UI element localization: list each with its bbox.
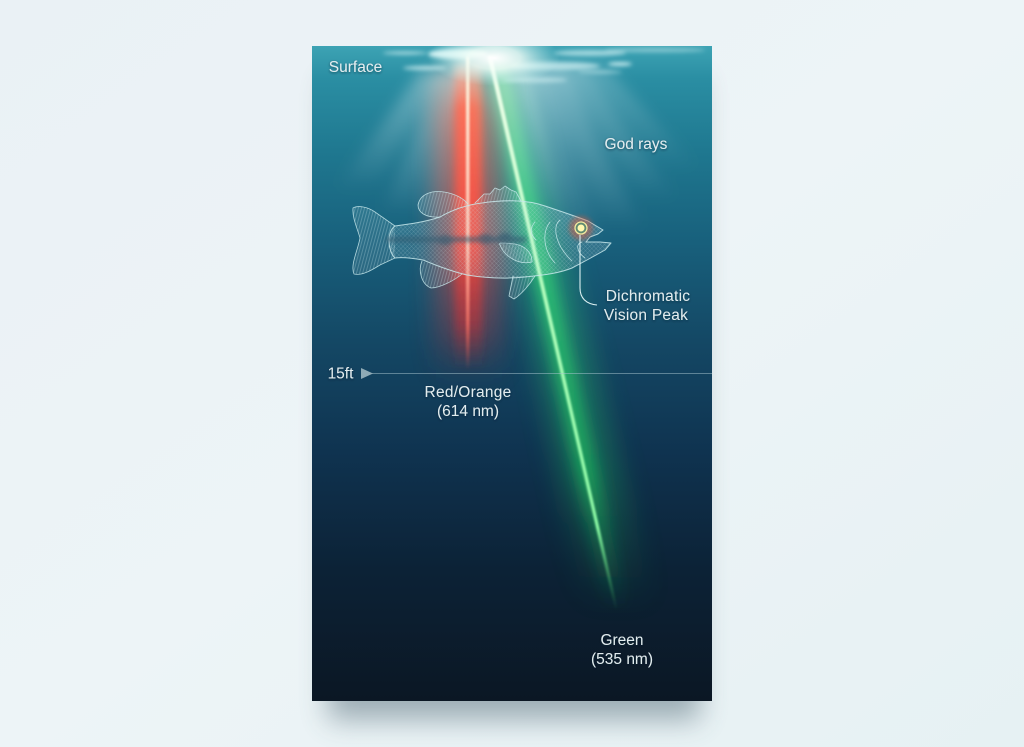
fish body <box>389 201 611 278</box>
water surface glints <box>383 48 705 82</box>
label: Red/Orange 614 nm: (614 nm) <box>437 403 499 420</box>
gill and mouth lines <box>531 220 585 263</box>
panel shadow <box>328 80 700 720</box>
label: Dichromatic Vision Peak <box>604 288 690 324</box>
panel: underwater scene <box>312 30 712 701</box>
pectoral fin <box>499 243 532 263</box>
fish <box>353 186 611 299</box>
label: Green 535 nm <box>591 632 653 668</box>
label: Surface: Surface <box>329 59 382 76</box>
label: Dichromatic Vision Peak: Dichromatic <box>606 288 690 305</box>
15ft depth line <box>361 368 712 379</box>
label: Green 535 nm: Green <box>600 632 644 649</box>
anal fin <box>420 261 462 288</box>
god rays <box>354 56 670 228</box>
surface light source <box>431 46 557 84</box>
infographic <box>311 46 720 740</box>
callout leader line <box>580 235 597 305</box>
label: Dichromatic Vision Peak: Vision Peak <box>604 307 688 324</box>
label: 15ft: 15ft <box>328 366 354 382</box>
dorsal fin front <box>418 192 468 217</box>
fish tail <box>353 207 395 274</box>
eye glow <box>569 216 593 240</box>
label: Red/Orange 614 nm: Red/Orange <box>425 384 511 401</box>
red light beam <box>436 56 502 382</box>
green light beam <box>480 56 655 610</box>
ventral fin <box>509 276 535 299</box>
label: Red/Orange 614 nm <box>425 384 511 420</box>
spiny dorsal fin <box>475 186 521 203</box>
label: God rays: God rays <box>605 136 668 153</box>
label: Green 535 nm: (535 nm) <box>591 651 653 668</box>
lateral stripe <box>386 233 526 245</box>
